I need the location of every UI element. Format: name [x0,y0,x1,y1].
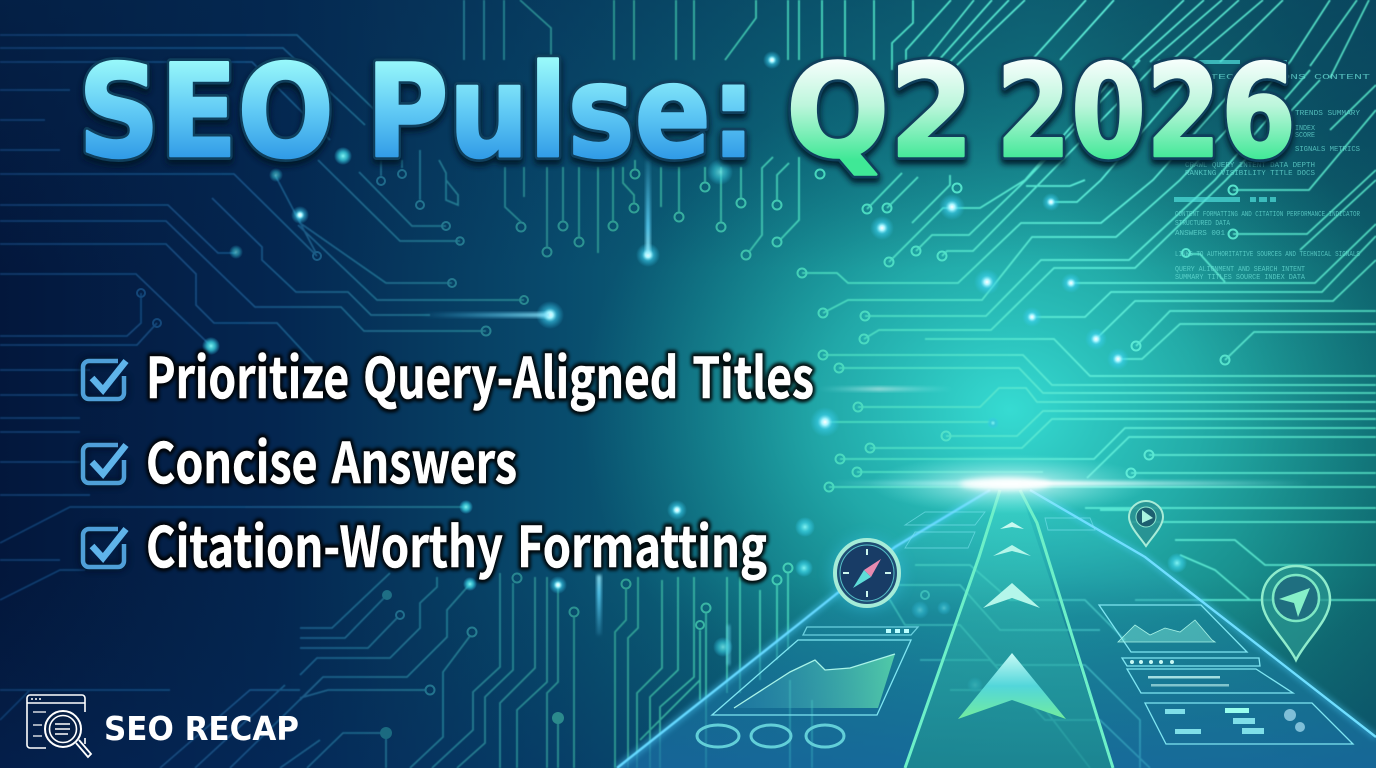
upper right traces [802,60,1376,360]
item: concise answers: Concise Answers [146,419,517,500]
lower centre traces [280,573,788,768]
title shadow: Q2 [786,42,974,191]
data readout text: STRUCTURED DATA [1175,220,1231,228]
icon: large location pin [1262,566,1330,660]
left traces [0,35,524,768]
data readout text: SCORE [1295,132,1315,140]
data readout text: SUMMARY TITLES SOURCE INDEX DATA [1175,274,1306,282]
data readout text: ANSWERS 001 [1175,230,1225,238]
data readout text: TRENDS SUMMARY [1295,110,1361,118]
item: prioritize titles: Prioritize Query-Aligned Titles [146,334,814,415]
upper centre drop lines [381,150,799,253]
data readout text: QUERY ALIGNMENT AND SEARCH INTENT [1175,266,1306,274]
title outline: Pulse: [366,38,756,187]
navigation arrows [958,522,1066,719]
data panels right [905,512,1353,744]
title text green [786,38,1296,187]
title outline: 2026 [996,38,1296,187]
perspective road [617,490,1376,768]
horizon flare [830,454,1310,514]
right horizontal traces [823,339,1376,600]
title shadow: 2026 [996,42,1296,191]
title text green: 2026 [996,38,1296,187]
glowing nodes [202,51,1187,739]
title outline [78,38,1296,187]
title text green: Q2 [786,38,974,187]
icon: compass [830,536,904,610]
gauge rings [697,725,844,747]
title text blue: SEO [78,38,334,187]
road edges [617,490,1376,768]
top centre traces [464,0,1369,78]
title shadow: Pulse: [366,42,756,191]
item: concise answers: Concise Answers [146,419,517,500]
title shadow [78,42,1296,191]
data readout text: SIGNALS METRICS [1295,146,1360,154]
icon: browser with magnifier [27,695,91,757]
data readout text: RANKING VISIBILITY TITLE DOCS [1185,170,1315,178]
road surface [617,490,1376,768]
item: prioritize titles: Prioritize Query-Aligned Titles [146,334,814,415]
title text blue: Pulse: [366,38,756,187]
title outline: SEO [78,38,334,187]
title shadow: SEO [78,42,334,191]
title [78,38,1296,191]
data readout text: CRAWL QUERY INTENT DATA DEPTH [1185,162,1315,170]
icon: small location pin [1129,501,1163,546]
data readout text: INDEX [1295,125,1316,133]
brand name: SEO RECAP [104,709,299,748]
trace terminals [137,170,1238,694]
title text blue [78,38,756,187]
data readout text: TECH OPTIONS CONTENT [1210,74,1371,82]
road traces [790,565,1150,768]
checklist [83,334,814,584]
logo: SEO Recap [27,695,299,757]
item: citation formatting: Citation-Worthy Formatting [146,503,767,584]
centre lane [905,490,1113,768]
title outline: Q2 [786,38,974,187]
chart panel left [697,627,918,747]
item: citation formatting: Citation-Worthy Formatting [146,503,767,584]
data readout text [1174,60,1371,282]
